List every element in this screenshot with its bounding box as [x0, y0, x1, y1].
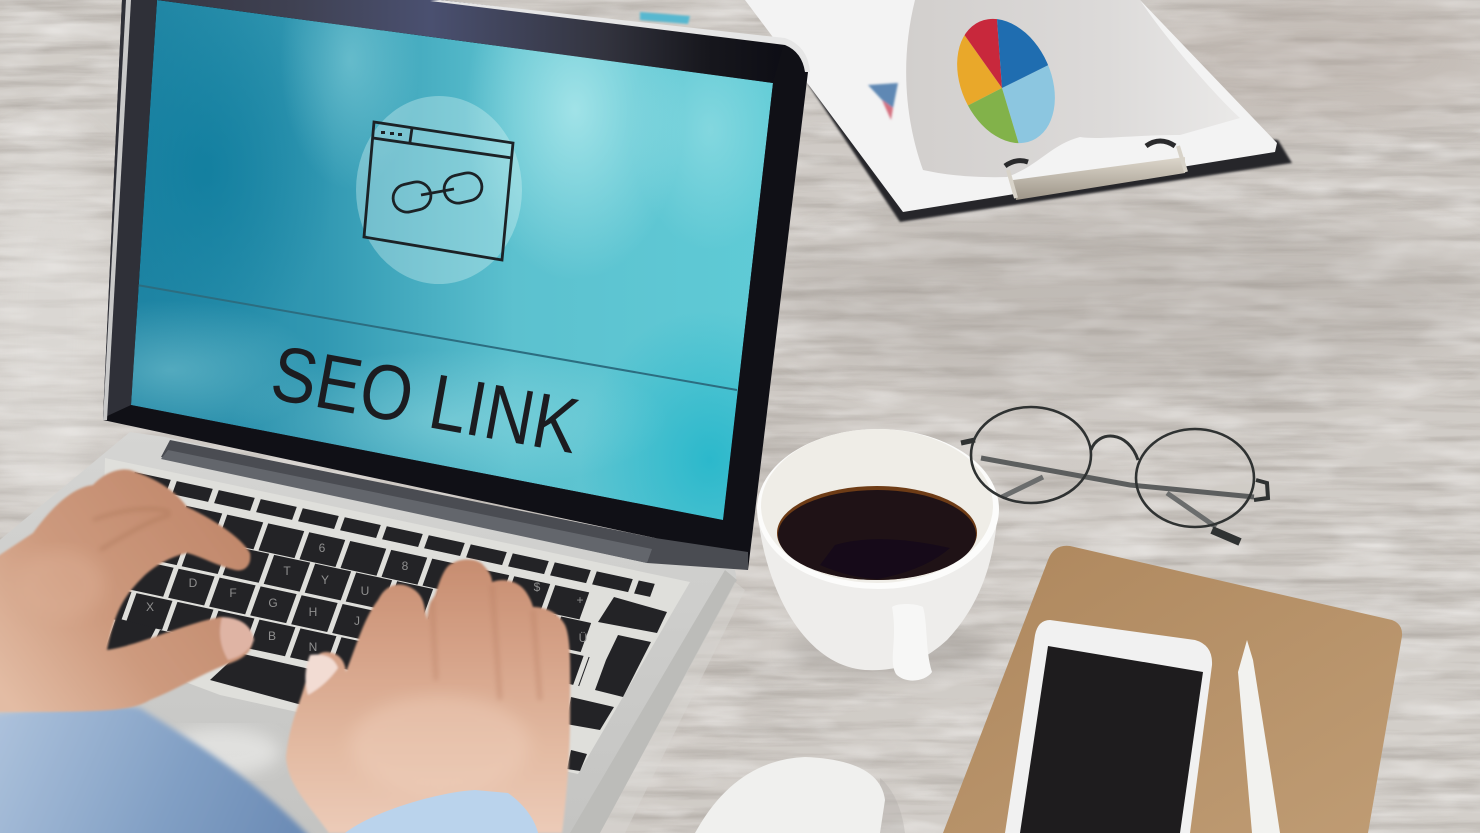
- large keys: [104, 597, 667, 771]
- pie chart: [957, 18, 1055, 144]
- key letters: $: [534, 580, 541, 594]
- function row: [132, 479, 652, 590]
- number row: [181, 519, 584, 606]
- coffee cup: [757, 429, 999, 681]
- phone: [1005, 620, 1212, 833]
- pen: [1238, 640, 1280, 833]
- sleeve: [0, 705, 322, 833]
- key letters: T: [283, 564, 291, 578]
- key letters: U: [361, 584, 369, 598]
- shirt cuff: [345, 790, 538, 833]
- laptop base: [0, 432, 745, 833]
- key letters: D: [189, 576, 198, 590]
- icon: link in browser window: [356, 96, 522, 284]
- finger creases: [93, 509, 170, 550]
- clipboard with chart: [640, 0, 1292, 238]
- keyboard keys: [80, 477, 652, 710]
- small chart fragment: [868, 83, 898, 120]
- cup handle: [892, 604, 932, 681]
- key letters: Ü: [579, 631, 587, 645]
- divider line: [137, 285, 737, 390]
- glasses: [961, 407, 1268, 542]
- key letters: J: [354, 614, 360, 628]
- key letters: X: [146, 600, 154, 614]
- key letters: +: [576, 593, 584, 607]
- home row: [91, 566, 584, 672]
- notebook: [943, 546, 1402, 833]
- mouse: [695, 757, 905, 833]
- curled page: [906, 0, 1240, 177]
- thumbnail: [220, 617, 254, 660]
- clip: [1013, 157, 1185, 200]
- screen: [131, 0, 773, 520]
- key letters: F: [229, 586, 237, 600]
- right hand: [286, 560, 570, 833]
- heading: SEO LINK: SEO LINK: [265, 328, 586, 470]
- hinge: [161, 440, 748, 570]
- key letters: H: [309, 605, 317, 619]
- qwerty row: [146, 543, 586, 638]
- left hand: [0, 470, 254, 712]
- key letters: G: [268, 596, 278, 610]
- finger shading: [432, 585, 540, 700]
- key letters: B: [268, 629, 276, 643]
- key letters: 8: [402, 559, 409, 573]
- laptop lid: [103, 0, 810, 570]
- key letters: N: [309, 640, 317, 654]
- lower row: [90, 599, 548, 697]
- key letters: 6: [319, 541, 326, 555]
- thumbnail: [305, 655, 338, 695]
- key letters: [146, 541, 587, 654]
- key letters: Y: [321, 573, 329, 587]
- keyboard well: [100, 458, 690, 774]
